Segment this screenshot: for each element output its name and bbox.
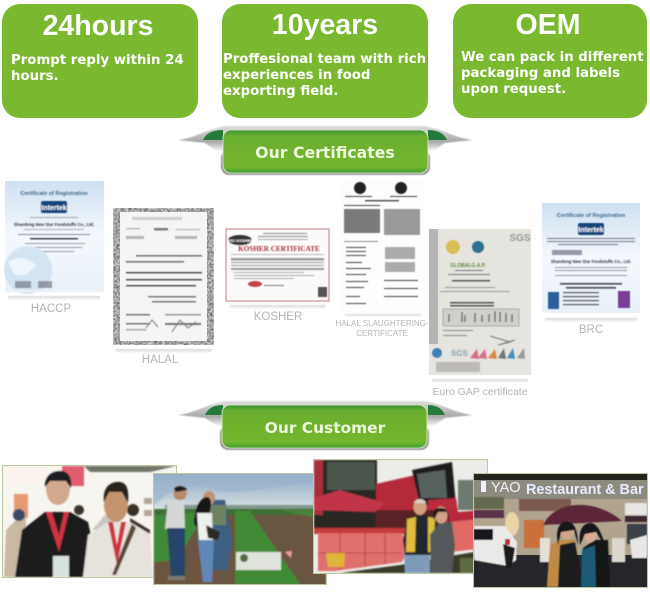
panel: OEM	[453, 4, 647, 118]
label: KOSHER: KOSHER	[254, 311, 302, 323]
banner title: Our Customer	[265, 419, 386, 437]
sign text: YAO	[491, 480, 521, 496]
text: professional team: exporting field.	[223, 84, 338, 99]
text: prompt reply: Prompt reply within 24	[11, 53, 184, 68]
certificate: HACCP	[4, 181, 104, 315]
banner title: Our Certificates	[255, 143, 395, 162]
text: professional team: Proffesional team with rich	[223, 52, 426, 67]
photo: two men at trade show	[2, 466, 176, 578]
certificate: HACCP: Shandong New Star Foodstuffs Co., Ltd.	[14, 222, 94, 227]
photo: YAO restaurant: Restaurant & Bar	[526, 482, 644, 498]
label: HACCP: HACCP	[31, 303, 71, 315]
label: halal slaughtering certificate: HALAL SLAUGHTERING-	[335, 319, 429, 328]
text: packaging: upon request.	[461, 82, 566, 97]
photo: YAO restaurant	[474, 474, 648, 588]
label: HALAL: HALAL	[142, 354, 179, 366]
certificate: HACCP: Intertek	[41, 205, 67, 212]
certificate: BRC: Certificate of Registration	[557, 213, 626, 219]
banner: our customer	[178, 401, 473, 450]
heading: 24hours: 24hours	[43, 10, 153, 42]
certificate: KOSHER: KOSHER CERTIFICATE	[238, 245, 320, 253]
text: packaging: We can pack in different	[461, 50, 644, 65]
certificate: HALAL	[113, 208, 214, 366]
panel: 10years	[222, 4, 428, 118]
panel: 24hours	[2, 4, 198, 118]
certificate: BRC	[542, 203, 640, 336]
text: prompt reply: hours.	[11, 69, 59, 84]
heading: OEM: OEM	[516, 9, 580, 41]
text: professional team: experiences in food	[223, 68, 370, 83]
text: packaging: packaging and labels	[461, 66, 620, 81]
certificate: halal slaughtering	[335, 180, 429, 338]
banner: our certificates	[178, 126, 473, 175]
certificate: Euro GAP	[429, 229, 531, 398]
heading: 10years: 10years	[272, 9, 378, 41]
label: Euro GAP certificate: Euro GAP certificate	[433, 386, 528, 398]
certificate: KOSHER: BSC KOSHER	[227, 239, 253, 243]
label: BRC: BRC	[579, 324, 603, 336]
label: halal slaughtering certificate: CERTIFICATE	[356, 329, 408, 338]
photo: visitors in green field	[154, 474, 326, 585]
certificate: KOSHER	[226, 229, 329, 323]
certificate: BRC: Intertek	[578, 227, 604, 234]
certificate: Euro GAP: GLOBALG.A.P.	[450, 263, 486, 269]
certificate: Euro GAP: SGS	[509, 233, 531, 244]
certificate: BRC: Shandong New Star Foodstuffs Co., Ltd.	[551, 259, 631, 264]
photo: red harvester	[314, 460, 488, 574]
certificate: HACCP: Certificate of Registration	[20, 191, 88, 197]
certificate: Euro GAP: SGS	[451, 349, 469, 358]
